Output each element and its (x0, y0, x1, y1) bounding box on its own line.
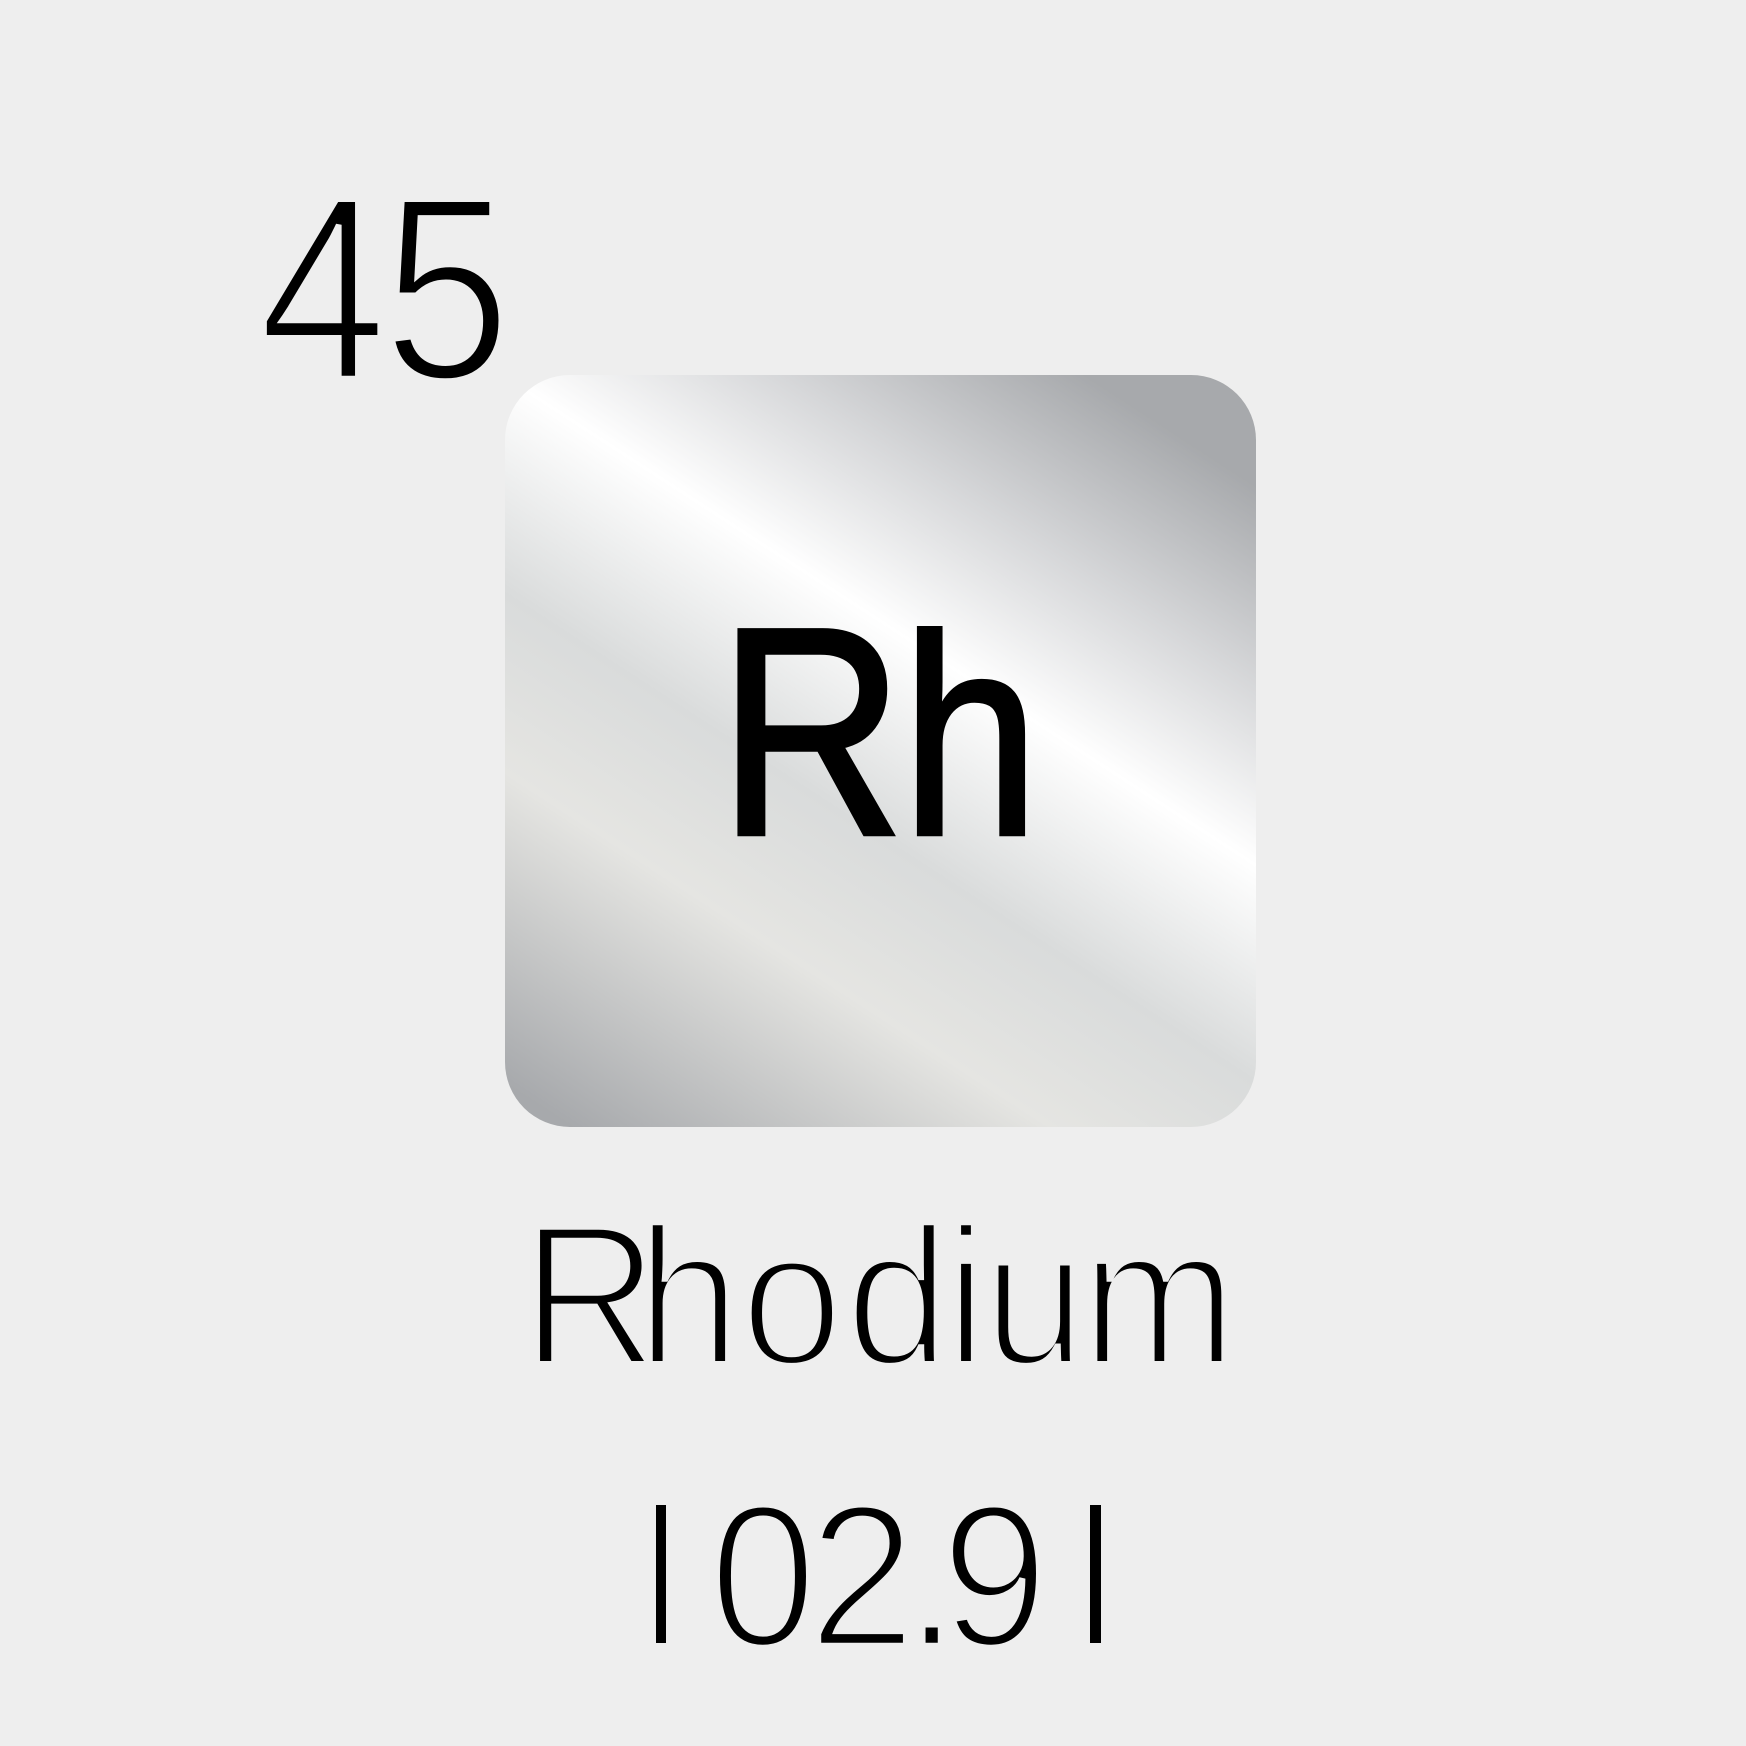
element name: m (1081, 1186, 1237, 1407)
element name: d (846, 1186, 950, 1407)
element name: h (637, 1186, 741, 1407)
element name: o (741, 1190, 843, 1407)
element name (521, 1183, 1237, 1408)
element symbol: R (718, 566, 904, 897)
element name: u (983, 1190, 1086, 1407)
element symbol (718, 566, 1039, 897)
element name: i (945, 1186, 987, 1407)
atomic weight (656, 1505, 1101, 1645)
atomic weight: 102.91 (608, 1462, 1148, 1689)
element tile (505, 375, 1256, 1127)
atomic number: 45 (259, 143, 511, 435)
element symbol: h (902, 578, 1039, 895)
element name: R (521, 1183, 659, 1408)
